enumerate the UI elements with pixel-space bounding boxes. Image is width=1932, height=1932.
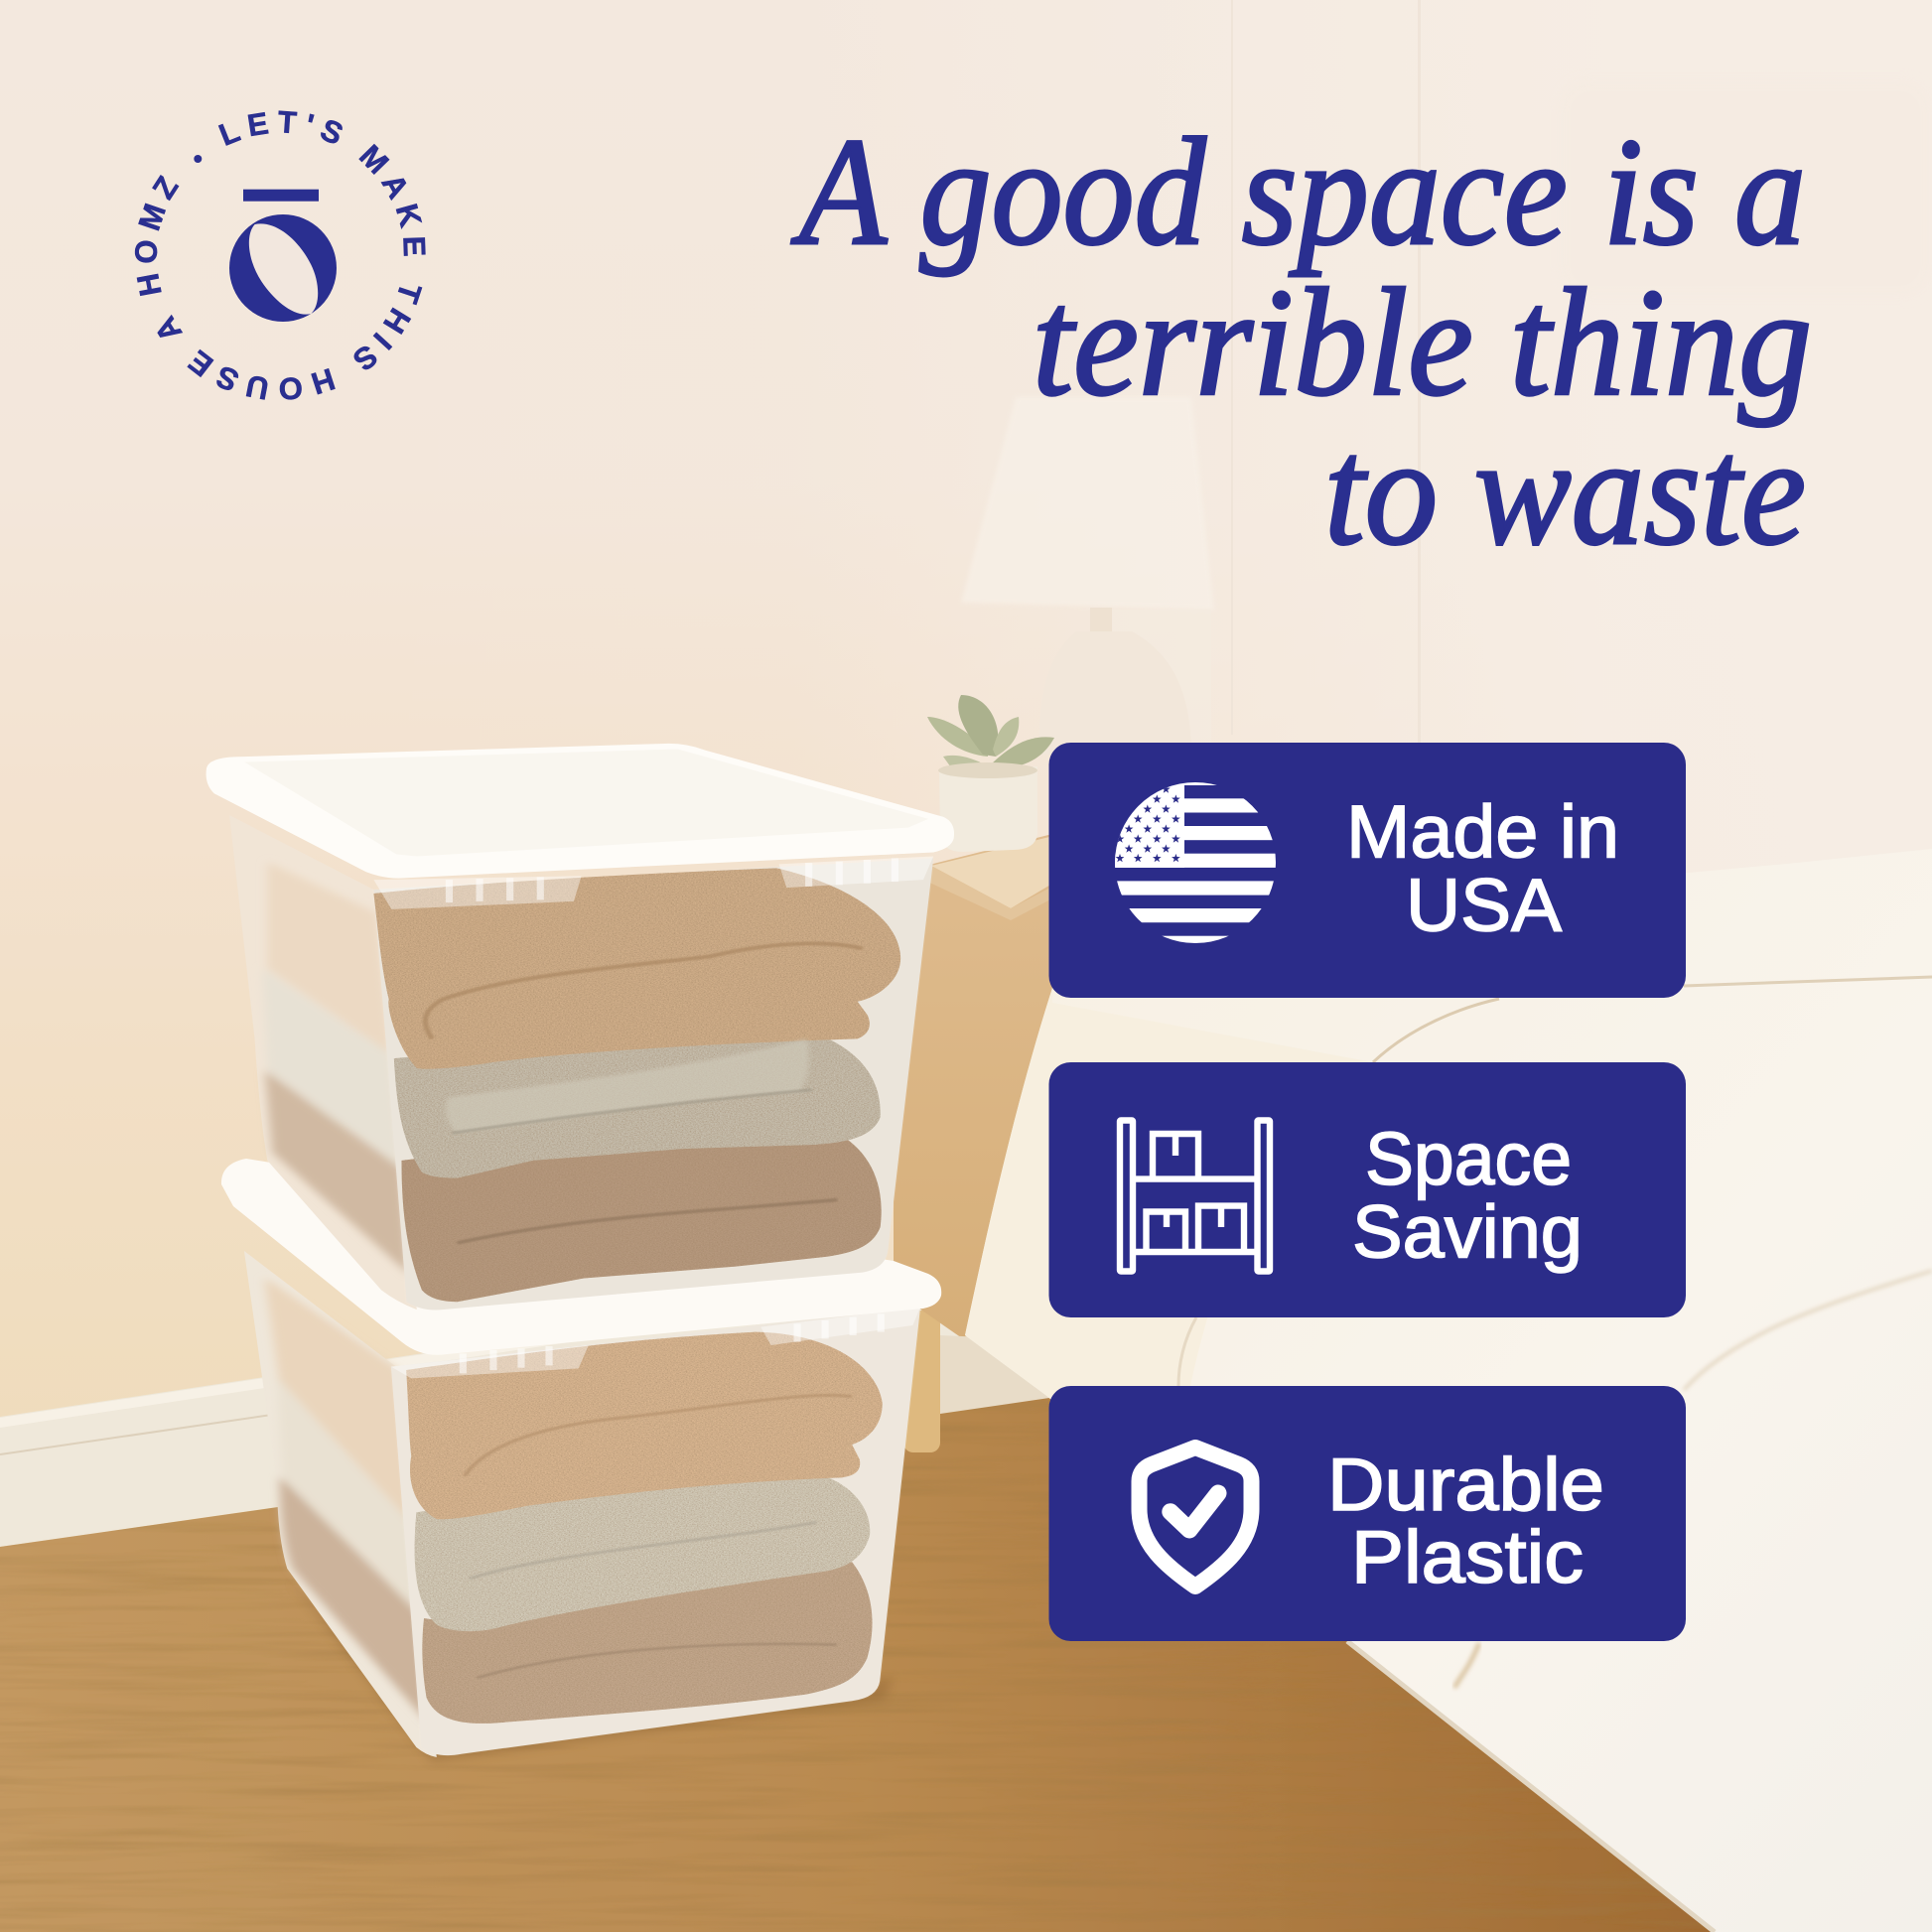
logo mark xyxy=(229,190,337,322)
label: space saving xyxy=(1352,1117,1583,1273)
bed with bedding xyxy=(965,849,1932,1932)
label: space saving: Saving xyxy=(1352,1189,1583,1273)
wooden floor xyxy=(0,1396,1715,1932)
title xyxy=(791,106,1812,577)
label: made in USA: USA xyxy=(1406,864,1562,947)
panel: space saving xyxy=(1048,1062,1686,1317)
box body and blankets xyxy=(244,1251,920,1757)
title: to waste xyxy=(1324,406,1806,577)
upper box clips xyxy=(373,856,933,909)
icon: shelf with boxes xyxy=(1120,1120,1270,1271)
lower lid xyxy=(221,1159,941,1355)
label: durable plastic: Durable xyxy=(1327,1443,1604,1526)
label: durable plastic: Plastic xyxy=(1351,1515,1584,1598)
title: A good space is a xyxy=(791,106,1806,277)
panel: made in USA xyxy=(1048,743,1686,998)
nightstand xyxy=(894,834,1052,1452)
label: made in USA: Made in xyxy=(1346,790,1619,874)
label: space saving: Space xyxy=(1365,1117,1572,1200)
icon: shield with check xyxy=(1140,1448,1251,1587)
plant in pot xyxy=(927,695,1054,852)
box front panel xyxy=(373,858,933,1310)
box floor shadow xyxy=(288,1579,894,1762)
title: terrible thing xyxy=(1033,257,1812,428)
label: made in USA xyxy=(1346,790,1619,947)
upper storage box xyxy=(207,744,954,1310)
logo ring text: LET'S MAKE THIS HOUSE A HOMZ xyxy=(135,110,426,400)
upper box blankets xyxy=(373,868,900,1302)
lower storage box xyxy=(221,1159,941,1762)
lower box clips xyxy=(391,1308,920,1378)
upper lid xyxy=(207,744,954,879)
icon: american flag xyxy=(1115,782,1276,943)
lower box blankets xyxy=(406,1332,883,1724)
box side panel xyxy=(229,815,417,1310)
logo: circular badge xyxy=(135,110,426,400)
baseboard xyxy=(0,1259,1052,1547)
table lamp xyxy=(961,397,1214,755)
panel: durable plastic xyxy=(1048,1386,1686,1641)
label: durable plastic xyxy=(1327,1443,1604,1598)
